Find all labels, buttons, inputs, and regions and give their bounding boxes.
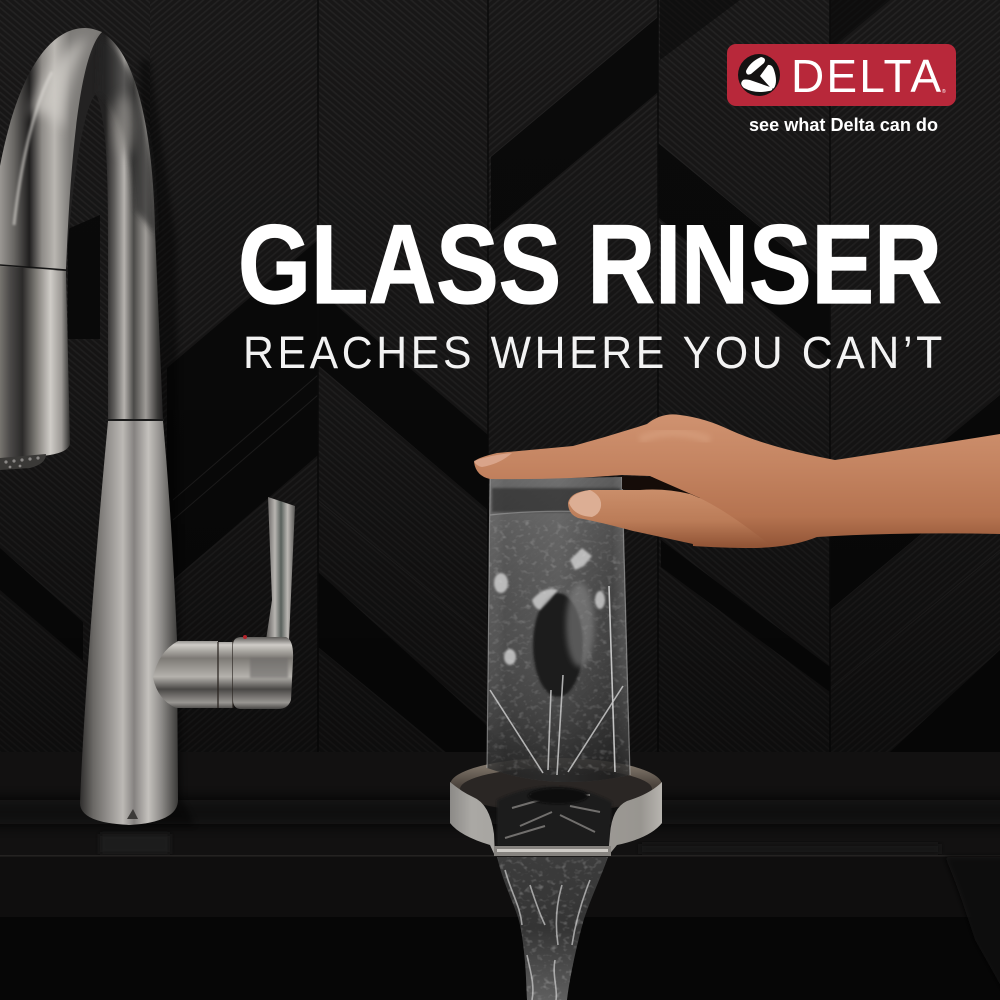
title: GLASS RINSER: [238, 201, 942, 327]
textured water on glass: [485, 520, 635, 775]
wordmark: DELTA: [791, 50, 941, 102]
drinking glass with spray: [485, 477, 635, 782]
glass rinser base: [450, 758, 662, 856]
tagline: see what Delta can do: [749, 115, 938, 135]
mixer hub and lever handle: [153, 497, 295, 709]
countertop: [0, 752, 1000, 1000]
water splashes: [494, 548, 605, 665]
finger gap shadow: [622, 476, 700, 498]
palm, index finger and arm: [474, 414, 1000, 548]
spray jets: [490, 586, 623, 775]
front lip: [494, 846, 611, 856]
pull-down spray head: [0, 265, 70, 470]
subtitle: REACHES WHERE YOU CAN’T: [243, 328, 942, 378]
spout tube: [0, 28, 163, 420]
thumbnail: [569, 490, 601, 517]
wall: chevron tile pattern: [0, 0, 1000, 752]
knuckle highlight: [640, 432, 710, 440]
icon: Delta tri-petal mark: [738, 54, 780, 96]
central spray shadow: [533, 593, 583, 697]
Delta logo: [727, 44, 956, 106]
index fingernail: [474, 453, 512, 467]
right wall: [608, 782, 662, 856]
thumb: [568, 490, 770, 547]
faucet body: [80, 420, 178, 825]
spout shadow on wall: [140, 60, 195, 825]
Delta logo: ®: [942, 88, 946, 95]
faucet: [0, 28, 295, 825]
glass base band: [492, 488, 622, 512]
water stream: [497, 857, 608, 1000]
hand: [474, 414, 1000, 548]
left wall: [450, 782, 495, 856]
glass edges: [487, 477, 630, 775]
